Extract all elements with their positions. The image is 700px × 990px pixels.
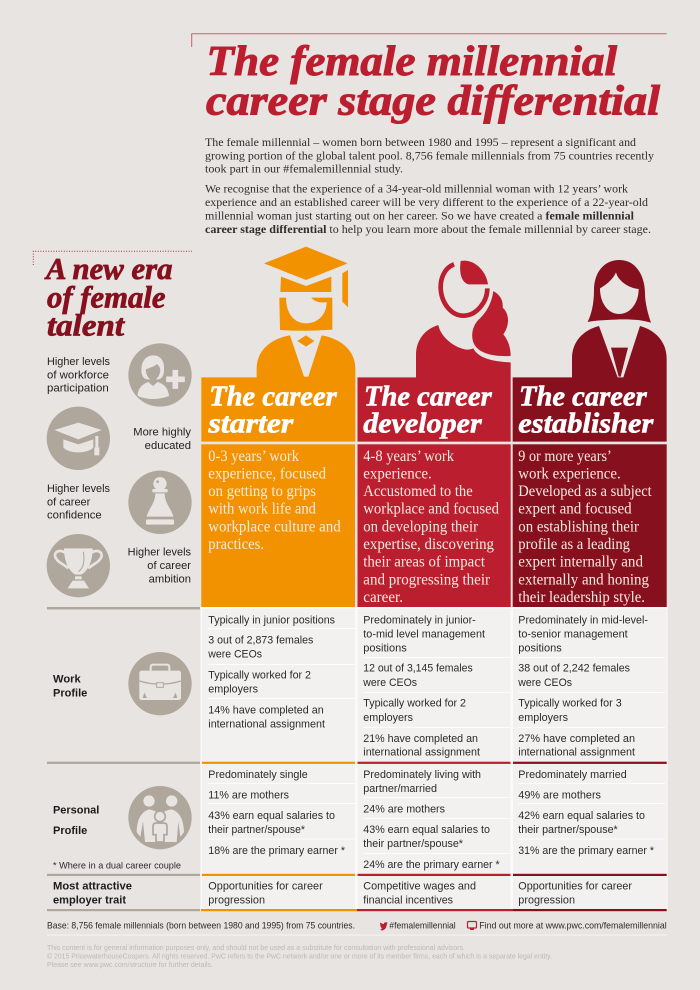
panel: establisher trait bbox=[518, 880, 632, 907]
panel: developer description: career. bbox=[363, 589, 403, 606]
panel: establisher description bbox=[513, 444, 667, 607]
panel: starter personal profile: 18% are the primary earner * bbox=[208, 845, 346, 857]
panel: establisher trait: Opportunities for career bbox=[518, 880, 632, 892]
panel: developer work profile: Predominately in junior- bbox=[363, 614, 476, 626]
panel: establisher personal profile: 42% earn equal salaries to bbox=[518, 810, 645, 822]
panel: developer description: expertise, discovering bbox=[363, 536, 494, 553]
panel: developer trait bbox=[363, 880, 476, 907]
label: work profile: Profile bbox=[53, 688, 87, 700]
intro text bbox=[205, 137, 654, 236]
label: more highly educated bbox=[133, 427, 192, 452]
disclaimer: © 2015 PricewaterhouseCoopers. All rights reserved. PwC refers to the PwC network and/or one or more of its member firms, each of which is a separate legal entity. bbox=[47, 952, 552, 960]
find out more link: Find out more at www.pwc.com/femalemillennial bbox=[479, 919, 667, 930]
panel: career starter header with figure bbox=[201, 247, 355, 442]
panel: establisher trait: progression bbox=[518, 895, 575, 907]
label: more highly educated: educated bbox=[145, 440, 191, 452]
heading: the career starter bbox=[207, 382, 338, 440]
panel: developer trait: financial incentives bbox=[363, 895, 454, 907]
panel: starter personal profile: 11% are mothers bbox=[208, 790, 290, 802]
base note: Base: 8,756 female millennials (born between 1980 and 1995) from 75 countries. bbox=[47, 919, 355, 930]
panel: establisher personal profile: 49% are mothers bbox=[518, 790, 602, 802]
intro text: experience and an established career will be very different to the experience of a 22-year-old bbox=[205, 197, 648, 209]
panel: developer work profile: 12 out of 3,145 females bbox=[363, 663, 473, 675]
panel: developer trait: Competitive wages and bbox=[363, 880, 476, 892]
panel: starter work profile: employers bbox=[208, 684, 259, 696]
panel: establisher work profile: positions bbox=[518, 643, 562, 655]
panel: starter description: with work life and bbox=[208, 501, 316, 518]
panel: starter trait bbox=[208, 880, 323, 907]
panel: developer personal profile: 24% are the primary earner * bbox=[363, 859, 500, 871]
panel: establisher description: Developed as a subject bbox=[518, 483, 652, 500]
panel: career establisher header with figure bbox=[513, 260, 667, 442]
panel: starter description: workplace culture and bbox=[208, 518, 341, 535]
label: work profile bbox=[53, 674, 87, 700]
panel: developer personal profile: 43% earn equal salaries to bbox=[363, 824, 490, 836]
panel: establisher personal profile: 31% are the primary earner * bbox=[518, 845, 655, 857]
label: personal profile: Personal bbox=[53, 805, 99, 817]
footnote: dual career couple: * Where in a dual career couple bbox=[53, 859, 181, 870]
heading: a new era of female talent: A new era bbox=[44, 251, 173, 286]
icon: twitter bird bbox=[380, 922, 388, 930]
icon: chess pawn bbox=[128, 471, 192, 534]
heading: the career establisher: establisher bbox=[518, 409, 654, 440]
icon: family bbox=[128, 786, 192, 849]
label: career ambition: of career bbox=[147, 560, 191, 572]
label: workforce participation: Higher levels bbox=[47, 356, 111, 368]
panel: establisher personal profile bbox=[518, 769, 655, 857]
title: career stage differential bbox=[206, 78, 660, 124]
intro text: career stage differential to help you learn more about the female millennial by career stage. bbox=[205, 224, 651, 236]
hashtag: #femalemillennial bbox=[389, 919, 456, 930]
heading: the career establisher bbox=[518, 382, 654, 440]
label: career confidence: confidence bbox=[47, 510, 102, 522]
panel: establisher description: profile as a leading bbox=[518, 536, 630, 553]
heading: the career developer: The career bbox=[364, 382, 493, 413]
panel: starter trait: Opportunities for career bbox=[208, 880, 323, 892]
panel: establisher description: work experience. bbox=[518, 465, 621, 482]
title: The female millennial bbox=[206, 39, 617, 85]
panel: starter work profile: were CEOs bbox=[207, 649, 263, 661]
panel: starter trait: progression bbox=[208, 895, 265, 907]
panel: developer personal profile: partner/married bbox=[363, 783, 437, 795]
label: career ambition: Higher levels bbox=[128, 547, 192, 559]
panel: developer work profile bbox=[362, 614, 485, 759]
panel: establisher work profile: 38 out of 2,242 females bbox=[518, 663, 631, 675]
panel: developer work profile: Typically worked for 2 bbox=[363, 698, 466, 710]
label: workforce participation bbox=[47, 356, 111, 395]
panel: establisher description: 9 or more years’ bbox=[518, 448, 612, 465]
heading: the career developer: developer bbox=[363, 409, 483, 440]
label: career confidence: of career bbox=[47, 496, 91, 508]
panel: starter personal profile: 43% earn equal salaries to bbox=[208, 810, 335, 822]
panel: developer work profile: international assignment bbox=[363, 747, 480, 759]
panel: establisher personal profile: Predominately married bbox=[518, 769, 627, 781]
disclaimer: Please see www.pwc.com/structure for further details. bbox=[47, 960, 213, 969]
panel: starter work profile: 3 out of 2,873 females bbox=[208, 635, 314, 647]
panel: starter personal profile bbox=[208, 769, 346, 857]
icon: woman with plus bbox=[128, 343, 192, 407]
panel: establisher description: their leadership style. bbox=[518, 589, 645, 606]
label: career confidence: Higher levels bbox=[47, 483, 111, 495]
label: personal profile bbox=[53, 805, 99, 837]
label: career ambition bbox=[128, 547, 192, 585]
panel: developer personal profile bbox=[363, 769, 500, 871]
label: most attractive employer trait: Most attractive bbox=[53, 880, 132, 892]
label: most attractive employer trait bbox=[53, 880, 132, 906]
panel: developer work profile: to-mid level management bbox=[363, 629, 485, 641]
panel: starter work profile: 14% have completed an bbox=[208, 705, 324, 717]
panel: starter description: on getting to grips bbox=[208, 483, 316, 500]
panel: establisher work profile: Typically worked for 3 bbox=[518, 698, 622, 710]
panel: starter personal profile: their partner/spouse* bbox=[208, 824, 306, 836]
panel: starter description: practices. bbox=[208, 536, 264, 553]
label: personal profile: Profile bbox=[53, 825, 87, 837]
heading: a new era of female talent: talent bbox=[47, 308, 125, 343]
panel: establisher personal profile: their partner/spouse* bbox=[518, 824, 618, 836]
intro text: took part in our #femalemillennial study. bbox=[205, 164, 403, 176]
panel: establisher work profile: 27% have completed an bbox=[518, 733, 635, 745]
panel: developer description bbox=[358, 444, 511, 607]
panel: starter work profile: Typically worked for 2 bbox=[208, 670, 311, 682]
heading: the career developer bbox=[363, 382, 493, 440]
panel: starter work profile: international assignment bbox=[208, 719, 325, 731]
heading: the career starter: starter bbox=[207, 409, 295, 440]
panel: developer work profile: were CEOs bbox=[362, 677, 418, 689]
panel: starter description: experience, focused bbox=[208, 465, 326, 482]
panel: establisher work profile: international assignment bbox=[518, 747, 635, 759]
intro text: We recognise that the experience of a 34-year-old millennial woman with 12 years’ work bbox=[205, 184, 628, 196]
panel: establisher work profile: Predominately in mid-level- bbox=[518, 614, 648, 626]
panel: establisher description: externally and honing bbox=[518, 571, 649, 588]
panel: establisher work profile: to-senior management bbox=[518, 629, 628, 641]
panel: developer personal profile: 24% are mothers bbox=[363, 804, 446, 816]
panel: starter work profile: Typically in junior positions bbox=[208, 614, 336, 626]
label: more highly educated: More highly bbox=[133, 427, 192, 439]
icon: graduation cap bbox=[47, 407, 110, 470]
panel: establisher description: on establishing their bbox=[518, 518, 640, 535]
panel: establisher work profile: employers bbox=[518, 712, 569, 724]
heading: a new era of female talent bbox=[44, 251, 173, 343]
panel: developer description: workplace and focused bbox=[363, 501, 499, 518]
panel: establisher description: expert internally and bbox=[518, 554, 643, 571]
heading: a new era of female talent: of female bbox=[47, 280, 166, 315]
icon: monitor bbox=[468, 922, 476, 930]
label: work profile: Work bbox=[53, 674, 82, 686]
panel: developer description: 4-8 years’ work bbox=[363, 448, 454, 465]
label: workforce participation: participation bbox=[47, 383, 109, 395]
panel: establisher work profile bbox=[517, 614, 648, 759]
panel: developer work profile: 21% have completed an bbox=[363, 733, 478, 745]
label: most attractive employer trait: employer trait bbox=[53, 894, 126, 906]
panel: developer personal profile: Predominately living with bbox=[363, 769, 481, 781]
panel: starter description bbox=[201, 444, 355, 607]
panel: starter personal profile: Predominately single bbox=[208, 769, 308, 781]
label: career confidence bbox=[47, 483, 111, 522]
title bbox=[206, 39, 660, 124]
label: career ambition: ambition bbox=[149, 573, 191, 585]
icon: trophy bbox=[47, 534, 110, 597]
panel: developer description: experience. bbox=[363, 465, 432, 482]
heading: the career starter: The career bbox=[209, 382, 338, 413]
intro text: millennial woman just starting out on her career. So we have created a female millennial bbox=[205, 210, 634, 222]
panel: developer description: Accustomed to the bbox=[363, 483, 473, 500]
panel: developer description: and progressing their bbox=[363, 571, 491, 588]
panel: developer description: on developing their bbox=[363, 518, 479, 535]
panel: developer work profile: employers bbox=[363, 712, 414, 724]
panel: starter work profile bbox=[207, 614, 336, 731]
panel: developer personal profile: their partner/spouse* bbox=[363, 838, 464, 850]
disclaimer: This content is for general information purposes only, and should not be used as a substitute for consultation with professional advisors. bbox=[47, 943, 465, 952]
panel: establisher description: expert and focused bbox=[518, 501, 632, 518]
panel: developer work profile: positions bbox=[363, 643, 407, 655]
panel: career developer header with figure bbox=[358, 261, 511, 442]
icon: briefcase bbox=[128, 652, 192, 715]
panel: starter description: 0-3 years’ work bbox=[208, 448, 299, 465]
panel: developer description: their areas of impact bbox=[363, 554, 486, 571]
panel: establisher work profile: were CEOs bbox=[517, 677, 573, 689]
label: workforce participation: of workforce bbox=[47, 369, 109, 381]
disclaimer bbox=[47, 943, 552, 969]
intro text: growing portion of the global talent pool. 8,756 female millennials from 75 countries recently bbox=[205, 150, 654, 162]
intro text: The female millennial – women born between 1980 and 1995 – represent a significant and bbox=[205, 137, 636, 149]
heading: the career establisher: The career bbox=[519, 382, 648, 413]
